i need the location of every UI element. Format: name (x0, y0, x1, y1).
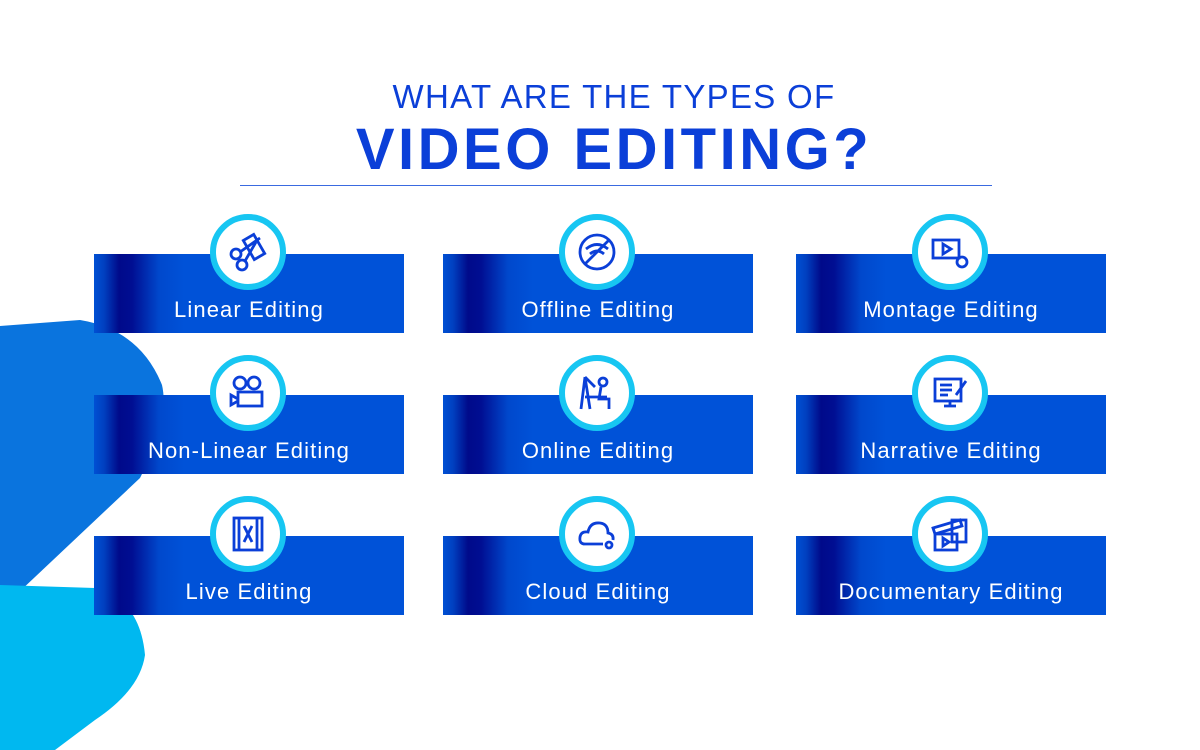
icon: scissors film (210, 214, 286, 290)
panel: Linear Editing: Linear Editing (174, 297, 324, 322)
icon: live film (210, 496, 286, 572)
panel: Cloud Editing: Cloud Editing (525, 579, 671, 604)
background shapes (0, 320, 164, 750)
panel: Cloud Editing (443, 536, 753, 615)
panel: Narrative Editing (796, 395, 1106, 474)
icon: clapboard (912, 496, 988, 572)
panel: Online Editing (443, 395, 753, 474)
panel: Montage Editing: Montage Editing (863, 297, 1039, 322)
panel: Documentary Editing (796, 536, 1106, 615)
title: VIDEO EDITING? (356, 117, 872, 182)
panel: Live Editing: Live Editing (186, 579, 312, 604)
icon: person at desk (559, 355, 635, 431)
panel: Non-Linear Editing (94, 395, 404, 474)
panel: Online Editing: Online Editing (522, 438, 674, 463)
panel: Documentary Editing: Documentary Editing (838, 579, 1064, 604)
icon: camera (210, 355, 286, 431)
panel: Offline Editing (443, 254, 753, 333)
panel: Live Editing (94, 536, 404, 615)
title: WHAT ARE THE TYPES OF (393, 78, 835, 115)
panel: Non-Linear Editing: Non-Linear Editing (148, 438, 350, 463)
title (356, 78, 872, 182)
panel: Narrative Editing: Narrative Editing (860, 438, 1042, 463)
icon: cloud (559, 496, 635, 572)
panel: Montage Editing (796, 254, 1106, 333)
panel: Offline Editing: Offline Editing (521, 297, 675, 322)
icon: offline (559, 214, 635, 290)
icon: narrative (912, 355, 988, 431)
panel: Linear Editing (94, 254, 404, 333)
icon: montage (912, 214, 988, 290)
